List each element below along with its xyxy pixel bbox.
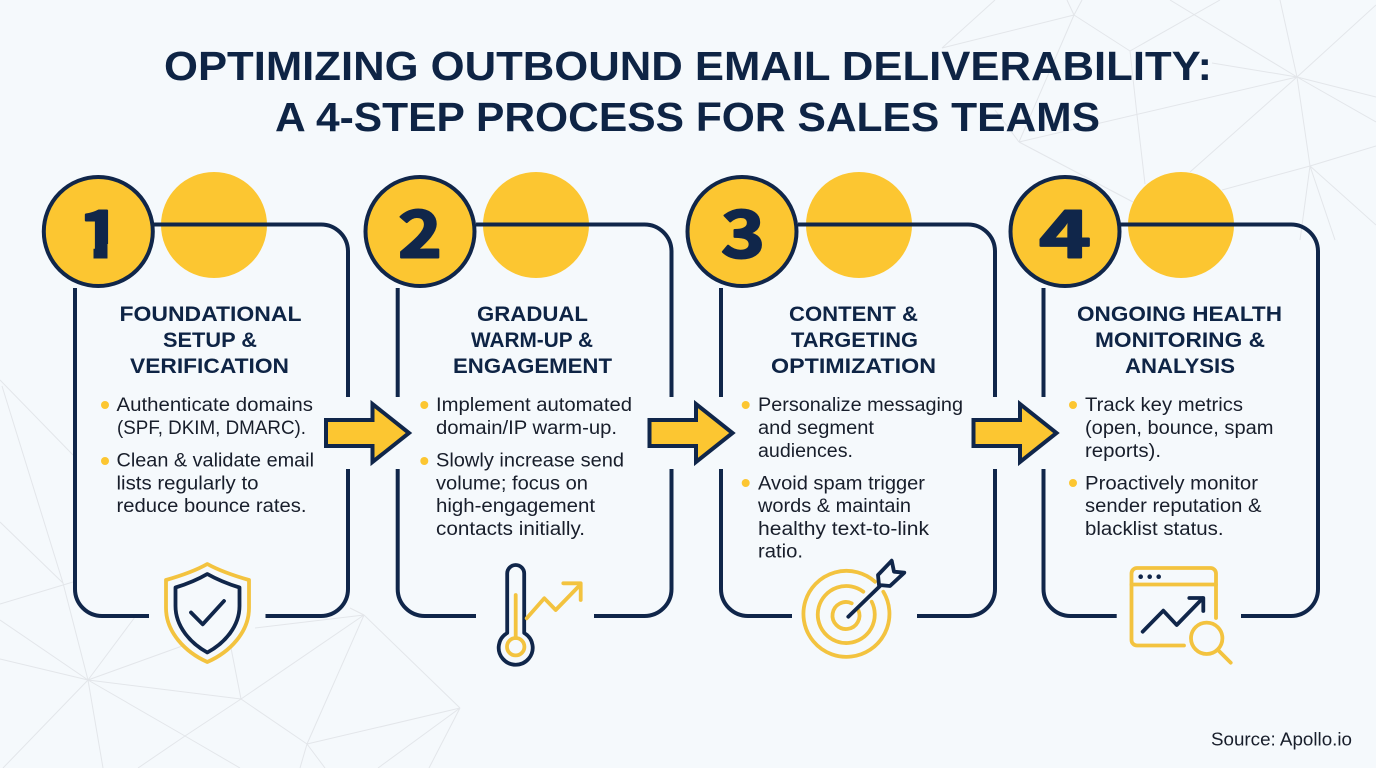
heading 2: GRADUAL [477,303,588,326]
bullet list 1: reduce bounce rates. [116,496,306,517]
panel outline 2 [398,224,672,616]
panel: step 1 foundational setup [44,172,348,662]
heading 1 [120,303,302,378]
bullet list 1 [101,395,314,517]
panel outline 1 [75,224,348,616]
bullet list 2: high-engagement [436,496,596,517]
icon: browser window with chart and magnifier [1132,568,1231,663]
bullet list 3: and segment [758,418,875,439]
bullet list 3: ratio. [758,542,803,562]
source note: Source: Apollo.io [1211,728,1352,750]
heading 4 [1077,303,1282,378]
bullet list 2: volume; focus on [436,474,588,494]
bullet list 4 [1069,395,1274,540]
arrow: step 3 to step 4 [974,404,1056,462]
bullet list 3: Avoid spam trigger [758,474,926,494]
heading 3 [771,303,936,378]
heading 2 [453,303,612,378]
bullet list 4: blacklist status. [1085,519,1224,540]
bullet list 4: (open, bounce, spam [1085,418,1274,439]
heading 1: SETUP & [163,329,257,352]
accent circle 3 [806,172,912,278]
accent circle 1 [161,172,267,278]
title: OPTIMIZING OUTBOUND EMAIL DELIVERABILITY: [164,43,1212,89]
heading 1: VERIFICATION [130,355,289,378]
bullet list 3: Personalize messaging [758,395,963,416]
icon: thermometer with rising trend [499,565,581,665]
title [164,43,1212,140]
number badge 4 [1010,177,1120,286]
bullet list 3 [742,395,963,562]
bullet list 2: contacts initially. [436,519,585,540]
bullet list 2 [420,395,632,540]
number badge 2: 2 [398,182,442,276]
heading 4: ONGOING HEALTH [1077,303,1282,326]
bullet list 4: Track key metrics [1085,395,1243,416]
heading 3: TARGETING [791,329,918,352]
bullet list 1: Clean & validate email [116,450,314,472]
arrow: step 1 to step 2 [326,404,409,462]
panel: step 2 gradual warm-up [366,172,672,665]
heading 2: ENGAGEMENT [453,355,612,378]
heading 3: CONTENT & [789,303,918,326]
number badge 1: 1 [78,182,122,276]
icon: shield with check [166,564,249,662]
number badge 3: 3 [721,182,765,276]
heading 3: OPTIMIZATION [771,355,936,378]
bullet list 2: domain/IP warm-up. [436,418,617,439]
number badge 3 [688,177,796,286]
icon: target with dart [803,561,904,657]
heading 1: FOUNDATIONAL [120,303,302,326]
arrow: step 2 to step 3 [650,404,732,462]
accent circle 4 [1128,172,1234,278]
number badge 4: 4 [1039,182,1091,276]
bullet list 1: lists regularly to [116,474,258,494]
bullet list 1: Authenticate domains [116,395,313,416]
bullet list 3: words & maintain [757,496,911,517]
number badge 2 [366,177,474,286]
bullet list 4: sender reputation & [1085,496,1262,517]
panel: step 3 content and targeting [688,172,995,657]
bullet list 3: healthy text-to-link [758,519,930,540]
heading 4: MONITORING & [1095,329,1265,352]
bullet list 1: (SPF, DKIM, DMARC). [117,418,306,439]
panel outline 3 [721,224,995,616]
bullet list 2: Slowly increase send [436,450,624,472]
heading 4: ANALYSIS [1125,355,1235,378]
panel outline 4 [1044,224,1318,616]
title: A 4-STEP PROCESS FOR SALES TEAMS [275,94,1100,140]
bullet list 4: Proactively monitor [1085,474,1259,494]
bullet list 4: reports). [1085,441,1161,462]
heading 2: WARM-UP & [471,329,593,352]
panel: step 4 ongoing monitoring [1010,172,1318,663]
bullet list 2: Implement automated [436,395,632,416]
accent circle 2 [483,172,589,278]
bullet list 3: audiences. [758,441,853,462]
number badge 1 [44,177,153,286]
